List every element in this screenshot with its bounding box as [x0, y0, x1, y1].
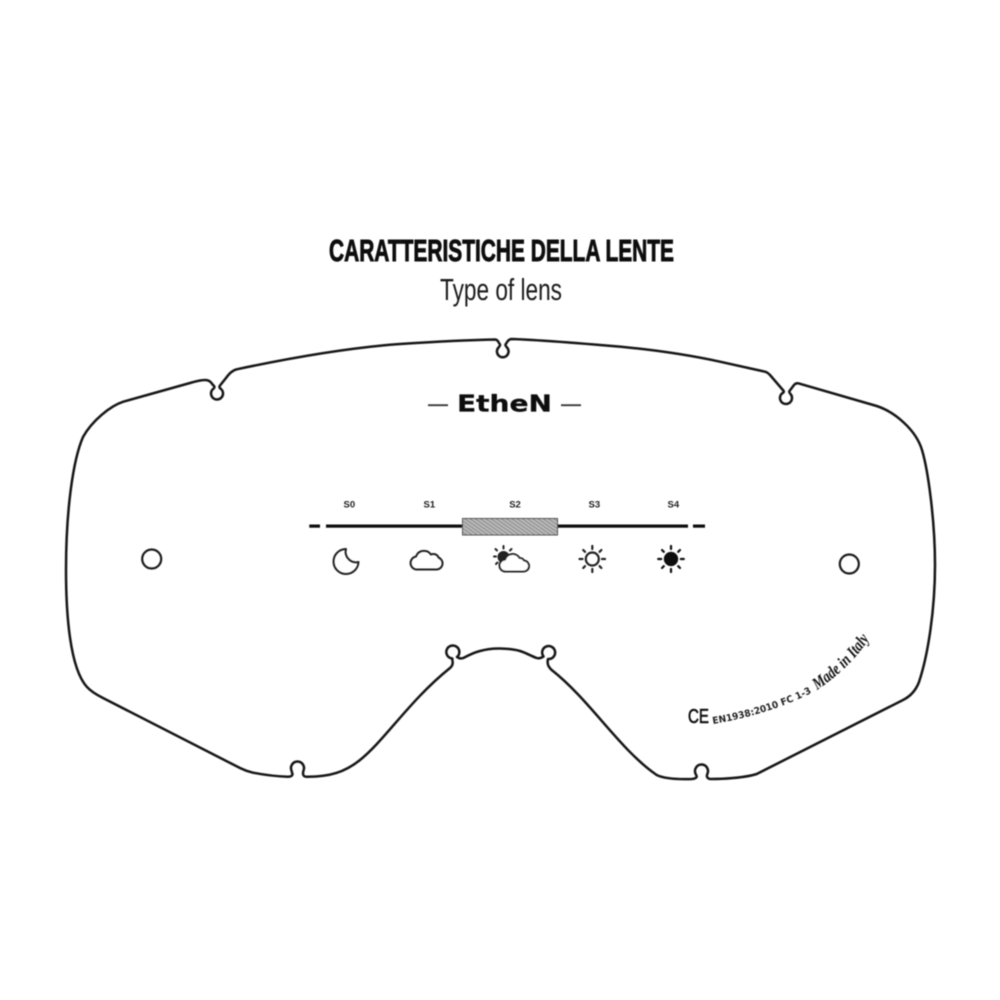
scale labels S0 to S4: S1	[423, 500, 436, 510]
active S2 marker	[462, 518, 558, 535]
filter category scale	[309, 500, 705, 574]
icon: sun behind cloud	[494, 546, 529, 572]
scale labels S0 to S4: S2	[509, 500, 521, 510]
scale labels S0 to S4: S0	[343, 500, 355, 510]
scale labels S0 to S4: S3	[588, 500, 600, 510]
icon: filled sun	[658, 546, 684, 572]
CE mark: CE	[688, 706, 709, 728]
icon: cloud	[411, 551, 443, 570]
title: CARATTERISTICHE DELLA LENTE	[329, 233, 674, 268]
left strap hole	[142, 550, 161, 568]
lens outline	[66, 339, 935, 779]
standard code on curve: EN1938:2010 FC 1-3	[712, 686, 812, 724]
made in Italy on curve: Made in Italy	[811, 634, 870, 691]
icon: outlined sun	[580, 546, 605, 572]
scale line	[309, 524, 705, 528]
icon: moon	[334, 549, 358, 574]
scale labels S0 to S4: S4	[667, 500, 680, 510]
right strap hole	[840, 554, 859, 574]
subtitle: Type of lens	[440, 272, 562, 307]
certification marking	[688, 634, 870, 728]
brand logo: Ethen: EtheN	[457, 392, 552, 418]
scale labels S0 to S4	[343, 500, 680, 510]
